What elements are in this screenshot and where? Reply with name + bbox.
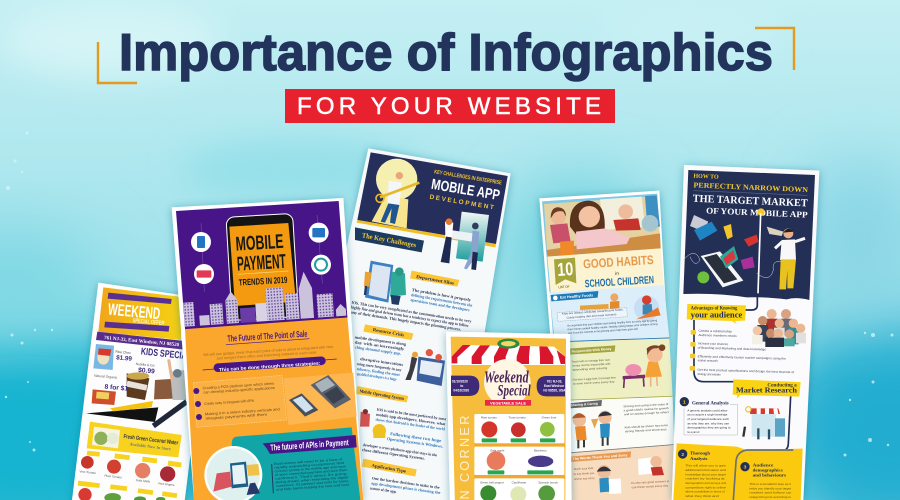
title badge: Weekend Special: Special <box>497 382 531 399</box>
product: cereal: Rice Chex <box>115 350 131 355</box>
section: the words thank you and sorry: use these words every day <box>632 483 669 489</box>
product: chocolate tub: $0.99 <box>138 367 155 375</box>
pill: sale dates <box>451 376 479 396</box>
orange body <box>185 317 363 500</box>
address strip: 761 NJ-33, East Windsor, NJ 08520 <box>104 336 180 348</box>
title band: Good Habits in School Children: LIST OF <box>558 285 570 289</box>
yellow banner <box>98 287 185 340</box>
illustration: group of people <box>752 309 806 347</box>
section: sharing and caring <box>565 397 674 453</box>
section 1: general analysis: as who they are, why they use <box>687 421 729 425</box>
tag: advantages of knowing your audience: your audience <box>691 310 743 319</box>
text block: resource: ming more frequently in any <box>357 361 402 372</box>
yellow banner: WEEKEND <box>107 300 161 323</box>
pill: store address: East Windsor <box>544 384 565 388</box>
yellow section: analysis steps: additional information and <box>685 468 726 472</box>
text block: application type: nature of the app. <box>370 485 397 494</box>
product grid: fruit prices <box>78 451 182 500</box>
section 1: general analysis: of your targeted audience such <box>687 417 729 421</box>
yellow section: analysis steps: where possibilities in terms of <box>685 490 725 494</box>
phone with title: PAYMENT <box>236 251 287 276</box>
product: juice boxes: 8 for $1 <box>104 384 129 393</box>
panel: weekend special vegetable sale card <box>446 332 572 500</box>
panel: coconut water: Fresh Green Coconut Water <box>123 434 179 447</box>
panel: future of APIs in payment: connect across to the mobile age and more <box>274 464 347 473</box>
panel: future of APIs in payment: The future of APIs in Payment <box>270 437 349 453</box>
text block: resource: ndustry, finding the most <box>357 366 401 377</box>
pill: store address <box>537 376 566 396</box>
illustration: shop <box>743 407 785 439</box>
list: three strategies: Creating a POS platform upon which others <box>202 382 274 390</box>
navy header: DEVELOPMENT <box>429 194 494 211</box>
text block: resource: mobile development is along <box>355 334 406 347</box>
runner graphic <box>86 359 187 426</box>
section: sharing and caring: and an activity enough for others <box>624 410 670 416</box>
text block: application type: One the hardest decisions to make in the <box>372 475 440 490</box>
tag: Department Silos: Department Silos <box>416 275 454 287</box>
list: three strategies: integrate payments with them <box>205 413 267 421</box>
pill: sale dates: 04/10/2020 <box>453 389 469 393</box>
panel: mobile payment trends card <box>172 198 363 500</box>
text block: operating system: Following these two huge <box>390 431 442 443</box>
tag: Resource Crisis <box>363 324 413 340</box>
tag: conducting a market research: Market Research <box>736 386 798 395</box>
title badge: Weekend Special: VEGETABLE SALE <box>490 400 526 405</box>
yellow section: analysis steps: This will allow you to gain <box>685 464 726 468</box>
navy header <box>683 170 815 300</box>
list: three strategies: Making it in a select industry verticals and <box>205 407 280 416</box>
address strip <box>96 332 185 350</box>
produce panels: Gala apple <box>490 448 505 452</box>
section: the words thank you and sorry: It's also very good manners to <box>631 479 670 485</box>
section: responsibility with money: Teach kids to manage their own <box>572 358 611 364</box>
text block: resource: qualified developers is a huge <box>357 371 397 382</box>
text block: resource: disruptive innovations <box>360 356 404 367</box>
yellow section: analysis steps: Analysis <box>690 456 708 461</box>
list: audience advantages: market research <box>698 358 718 363</box>
section: eat healthy foods: and fit and the nutrients in the growing years help them grow well <box>568 327 638 335</box>
illustration: man with megaphone <box>767 227 805 289</box>
list: audience advantages: Audience members needs <box>698 333 737 338</box>
pill: sale dates: to <box>460 384 463 388</box>
panel: future of APIs in payment: and help banks leading the new and next <box>276 483 349 492</box>
section: sharing and caring: strong friends and share toys <box>625 427 667 433</box>
section: responsibility with money: Give them a piggy bank. Encourage them <box>573 375 617 382</box>
produce panels: Blueberry <box>534 448 547 452</box>
text block: silos: The problem is how it properly <box>411 287 472 303</box>
section: responsibility with money: spending and saving <box>572 366 608 372</box>
list: audience advantages: Get the best product specifications and design the best channel of <box>697 368 794 374</box>
pill: strategies: This can be done through three strategies: <box>219 361 321 372</box>
section: eat healthy foods: Kids are always attracted towards junk foods, <box>562 307 624 316</box>
tag: Application Type: Application Type <box>371 464 406 475</box>
panel: coconut water: Available Now In Store <box>129 441 171 451</box>
produce panels: Cauliflower <box>512 480 526 484</box>
yellow section: analysis steps: Thorough <box>690 451 711 456</box>
section 1: general analysis: be a part of. <box>687 430 700 434</box>
title badge: Weekend Special <box>484 359 531 406</box>
panel: future of APIs in payment: Being ahead, when extending the digital <box>275 475 349 484</box>
panel: future of APIs in payment: of open connected payment and tech them <box>275 468 348 477</box>
text block: operating system: Operating Systems is Windows. <box>387 436 443 449</box>
list: three strategies: Create easy to integrate with APIs <box>204 399 254 406</box>
list: audience advantages: strategy and website <box>697 372 721 377</box>
subtitle banner: FOR YOUR WEBSITE <box>297 93 601 120</box>
list: three strategies <box>193 375 287 427</box>
purple header <box>176 201 347 328</box>
pill: strategies <box>203 356 337 372</box>
section: sharing and caring: Sharing & Caring <box>570 401 598 407</box>
section 1: general analysis: you to acquire a rough knowledge <box>687 413 728 417</box>
text block: operating system: developer a cross-platform app that stays in the <box>363 442 438 457</box>
navy header: KEY CHALLENGES IN ENTERPRISE <box>434 169 502 187</box>
product: juice boxes: Natural Organic <box>94 374 118 380</box>
tag: Mobile Operating System: Mobile Operating System <box>359 389 404 402</box>
text block: operating system: these different Operating Systems. <box>362 447 425 461</box>
icon: android <box>360 409 386 438</box>
yellow section: analysis steps: demographics <box>753 468 783 473</box>
text block: application type: app development phase is choosing the <box>371 480 441 495</box>
produce panels: Raw tomato <box>481 416 497 420</box>
illustration: phone with people <box>364 261 406 305</box>
section 1: general analysis: General Analysis <box>692 401 729 406</box>
navy header <box>357 152 508 270</box>
produce panels: Green lime <box>542 416 557 420</box>
section: responsibility with money: Responsible With Money <box>571 347 612 354</box>
text block: silos: defining the requirements between the <box>411 292 473 308</box>
yellow section: analysis steps: helps you identify your target <box>749 486 791 490</box>
panel: target market infographic card <box>672 165 819 500</box>
tag: advantages of knowing your audience <box>687 304 746 324</box>
icons: payment circles <box>191 215 331 292</box>
heading: The Future of the Point of Sale <box>226 329 309 345</box>
yellow section: analysis steps: Audience <box>753 463 773 468</box>
section: responsibility with money: to save some coins every day <box>573 379 615 386</box>
product grid: fruit prices: Gala Apple <box>136 478 151 484</box>
classroom photo <box>544 195 661 257</box>
phone with title: TRENDS IN 2019 <box>239 275 288 288</box>
text block: operating system <box>362 407 447 461</box>
text block: intro: We will see gadget, mean that each point of sale is about to integrated with new <box>203 345 333 357</box>
section 1: general analysis <box>680 397 737 435</box>
panel: future of APIs in payment <box>204 427 360 500</box>
produce panels: Truss tomato <box>508 416 526 420</box>
text block: silos <box>351 287 473 332</box>
phone with title <box>226 213 299 320</box>
tag: advantages of knowing your audience: Advantages of Knowing <box>691 307 738 312</box>
tag: conducting a market research: Conducting a <box>767 383 797 388</box>
product: chocolate tub <box>127 362 155 400</box>
illustration: resource team <box>405 349 445 386</box>
list: audience advantages: Increase your chances <box>698 341 729 346</box>
produce panels: Green bell pepper <box>480 480 504 484</box>
heading: kids specials: KIDS SPECIALS <box>140 346 196 363</box>
title band: Good Habits in School Children: 10 <box>557 258 574 280</box>
product grid: fruit prices: Vine Tomato <box>79 469 96 475</box>
section: the words thank you and sorry <box>568 445 677 500</box>
text block: silos: operations team and the developers <box>410 297 470 312</box>
panel: future of APIs in payment: Businesses will need to be a face of <box>274 457 342 466</box>
yellow banner: SPECIAL OFFER <box>132 318 165 327</box>
title: Importance of Infographics <box>119 24 773 82</box>
panel: coconut water <box>87 422 182 457</box>
text block: resource <box>355 334 406 382</box>
pill: store address: 761 NJ-33, <box>547 379 562 383</box>
section: eat healthy foods: them home cooked healthy meals. Healthy eating keeps your children strong <box>567 322 658 331</box>
produce panels: Spinach bunch <box>538 480 558 484</box>
panel: good habits infographic card <box>539 191 677 500</box>
section: eat healthy foods <box>549 285 669 342</box>
product: cereal: $1.99 <box>116 354 133 363</box>
text block: operating system: IOS is said to be the most preferred by most <box>377 407 447 421</box>
text block: resource: ching demand-supply gap. <box>355 344 401 356</box>
yellow section: analysis steps: demographics and surveys and <box>685 481 726 485</box>
yellow background <box>451 337 566 500</box>
section: eat healthy foods: It's important that your children start eating healthy from an early age by giving <box>567 318 658 328</box>
list: three strategies: can develop industry-specific applications <box>203 386 275 395</box>
product grid: fruit prices: Plum Tomato <box>104 474 122 480</box>
text block: operating system: shows that Android is the leader of the world <box>375 417 446 431</box>
yellow section: analysis steps: market by looking at <box>685 477 725 481</box>
tag: conducting a market research <box>733 379 801 398</box>
yellow section: analysis steps: and behaviours <box>753 473 786 478</box>
product: chocolate tub: Nutella & Go <box>136 362 155 368</box>
connector lines <box>694 295 791 500</box>
pill: store address: NJ 08520, USA <box>543 389 566 393</box>
section 1: general analysis: A generic analysis could allow <box>687 408 728 412</box>
section: the words thank you and sorry: to say thank you <box>574 471 595 476</box>
section: sharing and caring: Sharing and caring is the value of <box>623 402 669 408</box>
product: cereal <box>93 344 133 370</box>
panel: future of APIs in payment: rapidly expanding ecosystems that <box>274 461 344 470</box>
navy header: MOBILE APP <box>430 177 501 204</box>
tag: Resource Crisis: Resource Crisis <box>372 328 405 338</box>
phone with title: MOBILE <box>235 231 284 256</box>
yellow section: analysis steps: 3 <box>744 465 747 471</box>
panel: enterprise mobile app infographic card <box>340 148 511 500</box>
section: responsibility with money <box>555 338 673 401</box>
text block: silos: any of their demands. This hugely impacts the planning process. <box>351 309 462 332</box>
title band: Good Habits in School Children: GOOD HABITS <box>583 253 654 271</box>
navy header: OF YOUR MOBILE APP <box>706 205 809 220</box>
panel: future of APIs in payment: customers. That's where it's going. <box>275 472 348 481</box>
heading: The Future of the Point of Sale: The Future of The Point of Sale <box>227 329 308 344</box>
illustration: phone and commerce icons <box>683 215 782 287</box>
title band: Good Habits in School Children: in <box>615 271 619 276</box>
navy header: HOW TO <box>693 174 719 181</box>
section: eat healthy foods: Eat Healthy Foods <box>560 293 593 300</box>
heading badge: The Key Challenges <box>355 227 424 252</box>
list: audience advantages <box>690 329 794 377</box>
navy header: THE TARGET MARKET <box>693 194 808 209</box>
list: audience advantages: of Branding and Marketing and data knowledge <box>698 346 766 351</box>
right orange corner bracket <box>755 28 794 70</box>
list: audience advantages: Create a relationship <box>698 329 732 334</box>
section: eat healthy foods: Guide healthy diet and meal nutrients <box>566 312 617 320</box>
yellow section: analysis steps: market and follow up <box>749 491 791 495</box>
text block: silos: highly fine and goal driven team has a tendency to expect the app to follow <box>351 304 469 328</box>
yellow section: analysis steps: what they think and <box>685 494 719 498</box>
section: sharing and caring: Kids should be shown how to be <box>625 423 669 429</box>
tag: Department Silos <box>410 271 459 287</box>
section: responsibility with money: money and be responsible with <box>572 362 611 368</box>
text block: resource: day with an increasingly <box>355 339 405 351</box>
left orange corner bracket <box>98 42 137 83</box>
text block: intro: and merges them office and branching network in each case <box>216 350 317 361</box>
product: juice boxes <box>92 374 129 405</box>
pill: sale dates: 01/10/2020 <box>452 379 468 383</box>
produce panels <box>474 414 565 500</box>
section: the words thank you and sorry: and to say sorry <box>574 476 595 481</box>
tag: Application Type <box>362 459 417 476</box>
city skyline <box>182 269 346 327</box>
yellow section: analysis steps: categorizing into according to <box>749 495 791 499</box>
yellow section: analysis steps: This is a wonderful step as it <box>749 482 791 486</box>
text block: silos: IOS. This can be very complicated as the communication needs to be very <box>351 300 473 324</box>
panel: weekend special offer grocery card <box>70 283 210 500</box>
text block: operating system: mobile app developers. However, what <box>376 412 447 426</box>
panel: future of APIs in payment: customers, it's partners and tools for future <box>276 479 349 488</box>
illustration: card terminal and phone <box>283 373 357 425</box>
yellow section: analysis steps <box>673 443 803 500</box>
navy header: PERFECTLY NARROW DOWN <box>693 180 809 194</box>
section: sharing and caring: a good child's routine for growth <box>624 406 669 412</box>
tag: Mobile Operating System <box>356 386 408 402</box>
title band: Good Habits in School Children: SCHOOL CHILDREN <box>584 274 654 290</box>
title badge: Weekend Special: Weekend <box>484 368 529 387</box>
section: the words thank you and sorry: The Words Thank You and Sorry <box>572 453 628 461</box>
section 1: general analysis: 1 <box>683 400 686 406</box>
section: the words thank you and sorry: Teach your kids <box>573 466 594 471</box>
heading badge: The Key Challenges: The Key Challenges <box>361 231 417 249</box>
yellow section: analysis steps: 2 <box>681 452 684 458</box>
list: audience advantages: Efficiently and effectively launch market campaigns using the <box>698 354 786 361</box>
title band: Good Habits in School Children <box>547 248 664 293</box>
yellow section: analysis steps: competitors right to online <box>685 485 726 489</box>
section 1: general analysis: demographics they are going to <box>687 426 731 430</box>
product grid: fruit prices: Red Grapes <box>158 481 175 487</box>
awning <box>452 339 565 365</box>
yellow section: analysis steps: knowledge about your target <box>685 472 726 476</box>
